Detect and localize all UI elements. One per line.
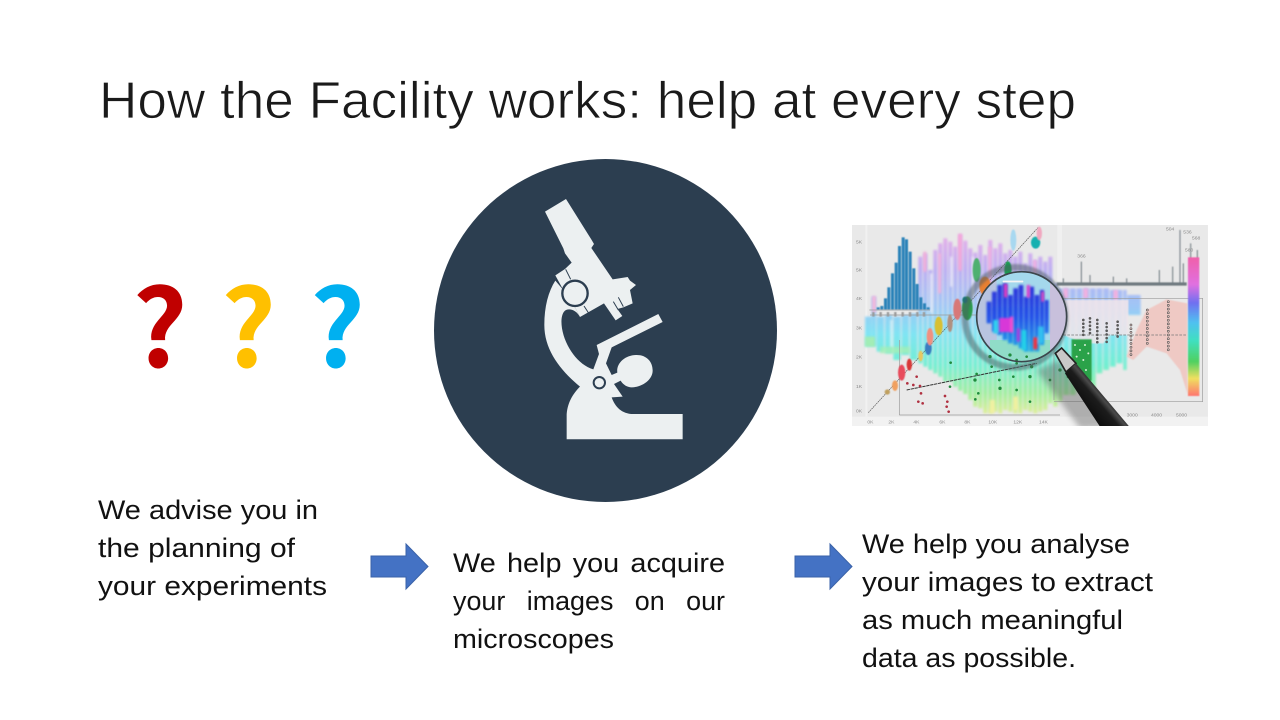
blue question mark: ? <box>310 243 365 398</box>
axis labels: 5000 <box>1176 413 1187 419</box>
axis labels: 4K <box>913 419 920 425</box>
pale wash over right columns <box>1063 300 1128 343</box>
text: analysis: your images to extract <box>862 567 1154 597</box>
text: acquisition <box>453 548 725 654</box>
handle <box>1065 363 1129 427</box>
colour scale bar <box>1188 257 1199 396</box>
lens shadow rim <box>965 267 1065 367</box>
axis labels: 4000 <box>1151 413 1162 419</box>
chart background <box>852 225 1208 426</box>
text: analysis: data as possible. <box>862 643 1076 673</box>
axis labels: 10K <box>988 419 998 425</box>
axis labels: 580 <box>1185 248 1194 254</box>
arrow: planning to acquisition <box>371 544 428 589</box>
coloured data clusters along diagonal <box>885 227 1042 395</box>
diagonal trend line and regression <box>868 227 1038 413</box>
lens rim <box>977 272 1067 362</box>
axis labels: 2K <box>888 419 895 425</box>
text: planning <box>98 495 327 601</box>
open circle marker columns <box>1083 302 1168 357</box>
red question mark: ? <box>132 243 188 398</box>
title: How the Facility works: help at every step <box>99 72 1076 130</box>
axis labels: 3000 <box>1127 413 1138 419</box>
text: planning: We advise you in <box>98 495 318 525</box>
text: planning: the planning of <box>98 533 296 563</box>
axis labels: 12K <box>1013 419 1023 425</box>
axis labels: 5K <box>856 239 863 245</box>
axis labels: 3K <box>856 325 863 331</box>
axis labels: 6K <box>939 419 946 425</box>
handle collar <box>1055 348 1076 372</box>
pink and white mottling over columns <box>865 234 1118 413</box>
text: analysis: We help you analyse <box>862 529 1130 559</box>
arrow: acquisition to analysis <box>795 544 852 589</box>
lens view <box>978 272 1066 361</box>
chart image: data under magnifying glass <box>852 225 1208 428</box>
axis labels: 536 <box>1183 229 1192 235</box>
text: acquisition: your images on our <box>453 586 725 616</box>
text: analysis: as much meaningful <box>862 605 1123 635</box>
text: acquisition: microscopes <box>453 624 614 654</box>
axis labels: 0K <box>867 419 874 425</box>
text: planning: your experiments <box>98 571 327 601</box>
axis labels <box>856 227 1201 425</box>
stage knob ring <box>594 377 605 388</box>
mass spectrum trace <box>1057 230 1197 284</box>
yellow question mark: ? <box>221 243 276 398</box>
green dense block <box>1072 339 1092 381</box>
axis labels: 1K <box>856 384 863 390</box>
axis labels: 5K <box>856 268 863 274</box>
text: acquisition: We help you acquire <box>453 548 725 578</box>
scattered points <box>906 375 950 413</box>
histogram tick labels <box>873 312 924 317</box>
axis labels: 2K <box>856 355 863 361</box>
axis labels: 8K <box>964 419 971 425</box>
axis labels: 504 <box>1166 227 1175 233</box>
magnifying glass <box>965 267 1129 428</box>
icon: microscope in dark circle <box>434 159 777 502</box>
axis labels: 366 <box>1077 253 1086 259</box>
handle shadow <box>1036 358 1100 426</box>
axis labels: 14K <box>1039 419 1049 425</box>
microscope silhouette <box>544 199 683 439</box>
pastel rainbow spectrum columns <box>865 234 1141 413</box>
pink shaded region <box>1127 299 1187 393</box>
focus knob ring <box>562 281 588 306</box>
text: analysis <box>862 529 1154 673</box>
axis labels: 4K <box>856 296 863 302</box>
question marks <box>132 243 365 398</box>
axis labels: 568 <box>1192 235 1201 241</box>
histogram <box>877 237 930 310</box>
axis labels: 0K <box>856 409 863 415</box>
inset chart frames <box>869 298 1203 415</box>
